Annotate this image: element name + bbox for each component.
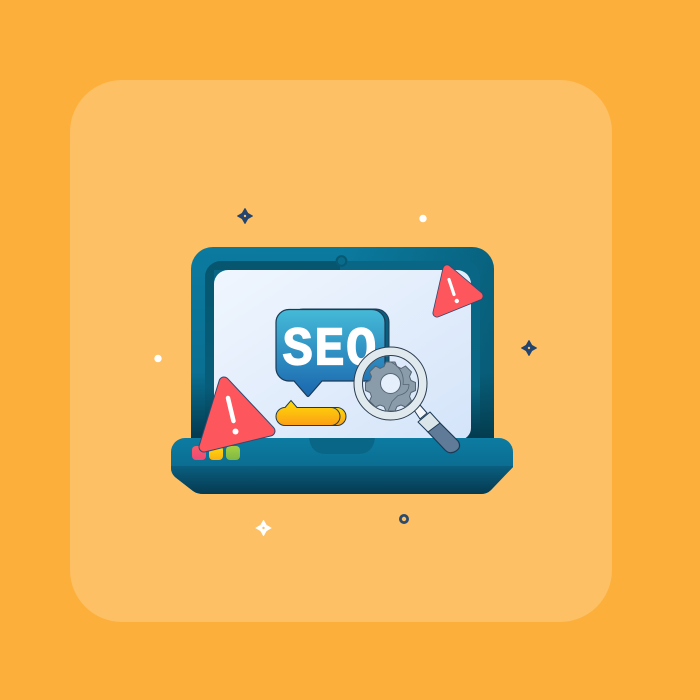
bubble body [276,310,385,396]
yellow label pill [276,400,346,426]
laptop base [171,438,513,494]
warning triangle: large [204,382,270,447]
dot: top [419,215,427,222]
sparkle: bottom white [256,520,271,536]
SEO text: SEO [282,319,378,381]
ring: bottom [400,515,408,523]
background panel [70,80,612,622]
screen [214,270,471,440]
bezel left shade [205,261,340,440]
dot: left [154,355,162,362]
gear [366,362,416,411]
warning triangle: small [437,269,479,313]
lens ring [358,352,422,416]
trackpad notch [309,438,375,454]
neck [414,405,427,419]
laptop lid [191,247,494,440]
collar [418,412,440,432]
handle [427,422,460,453]
lid right shade [191,247,494,440]
laptop [171,247,513,494]
exclamation mark [449,280,459,303]
magnifying glass [354,347,460,453]
exclamation mark [228,398,238,434]
screen bezel [205,261,480,440]
bubble shadow [290,309,389,381]
sparkle: top left [238,208,252,224]
status squares [192,446,240,460]
SEO speech bubble [276,309,389,396]
sparkle: right [522,340,536,356]
base front shade [171,466,513,494]
webcam [337,256,346,266]
